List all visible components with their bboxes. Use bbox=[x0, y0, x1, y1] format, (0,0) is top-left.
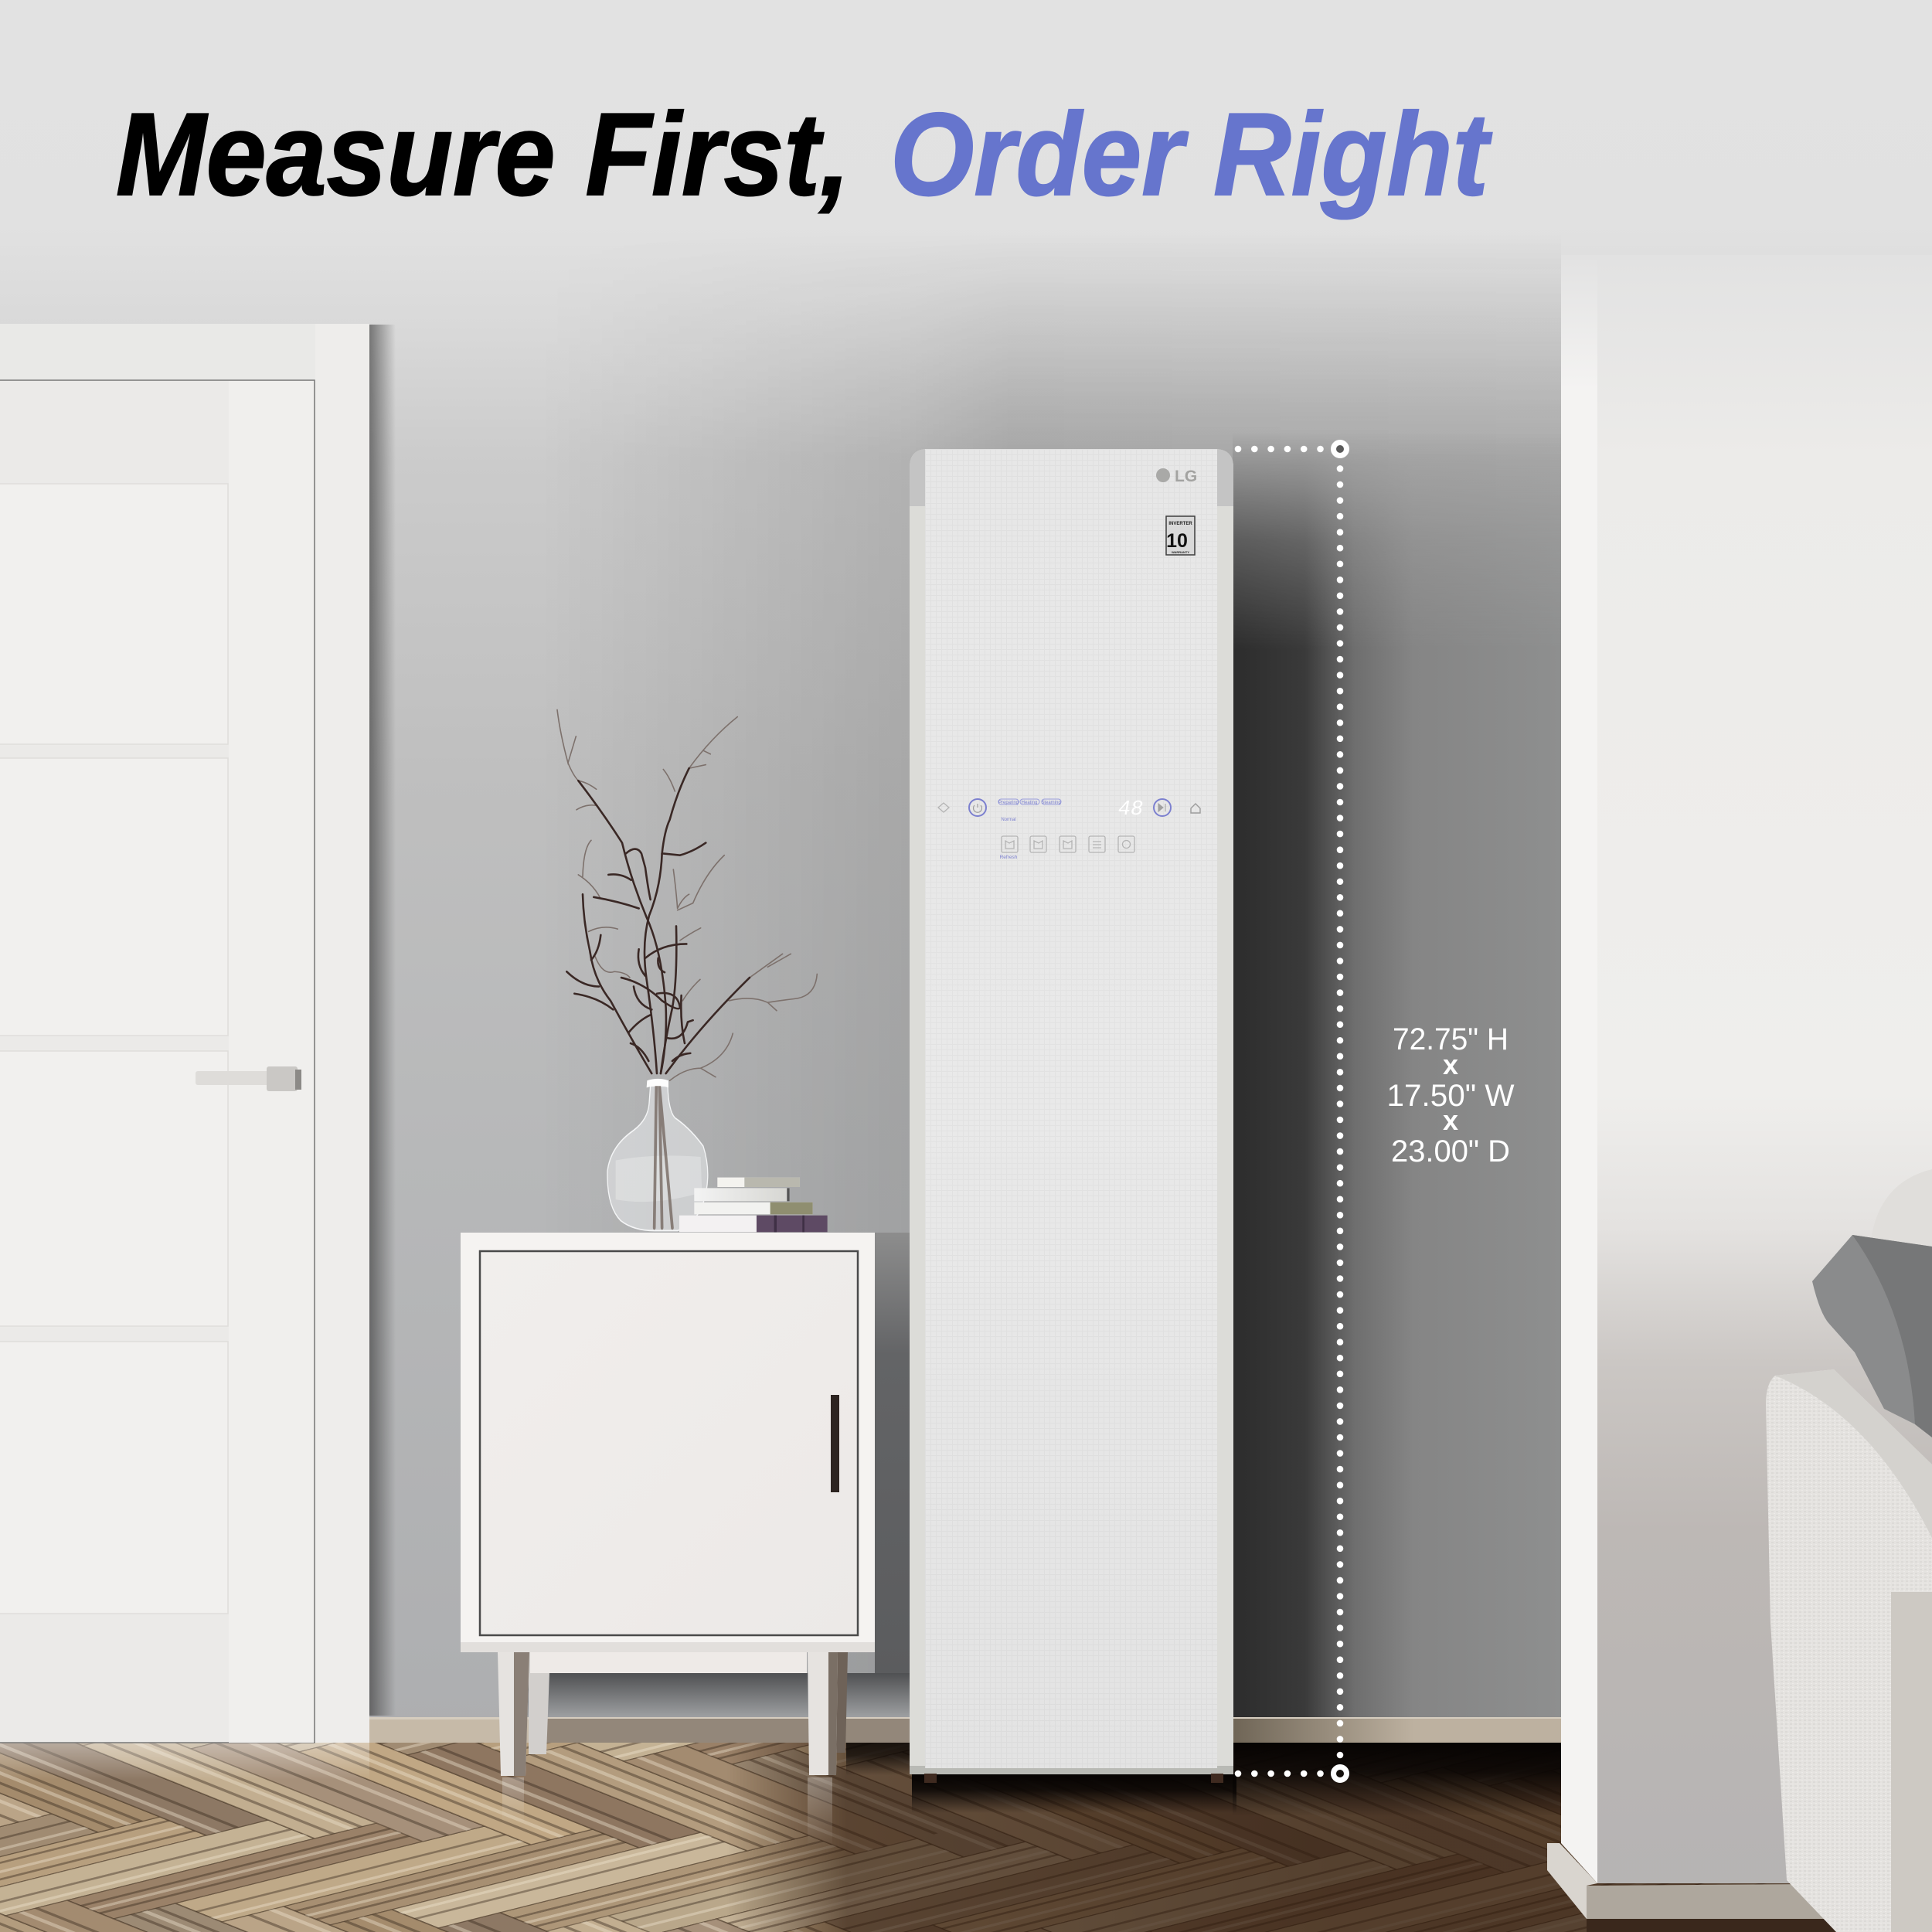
second book bbox=[694, 1188, 790, 1201]
wall corner band bbox=[1561, 255, 1597, 1883]
cycle status chips: Heating bbox=[1022, 801, 1037, 805]
door panels bbox=[0, 484, 228, 1614]
dimensions text: 17.50" W bbox=[1386, 1079, 1515, 1113]
cabinet body bbox=[461, 1233, 875, 1652]
home icon bbox=[1191, 804, 1200, 813]
inverter warranty badge: 10 bbox=[1166, 530, 1188, 552]
control panel bbox=[938, 798, 1200, 860]
height dimension line bbox=[1238, 442, 1346, 1781]
vase rim bbox=[647, 1079, 668, 1087]
grey pillow bbox=[1812, 1235, 1932, 1437]
wall face bbox=[1597, 255, 1932, 1883]
sofa with pillow bbox=[1766, 1169, 1932, 1932]
door handle bbox=[196, 1066, 301, 1091]
baseboard bbox=[369, 1717, 1565, 1743]
top end marker bbox=[1334, 442, 1346, 456]
inverter warranty badge: WARRANTY bbox=[1172, 550, 1189, 554]
styler front panel bbox=[925, 449, 1217, 1768]
start button bbox=[1154, 799, 1171, 816]
sofa arm bbox=[1766, 1369, 1932, 1932]
wheels bbox=[924, 1774, 1223, 1783]
title: Measure First, bbox=[116, 89, 850, 220]
bottom dotted leader bbox=[1238, 1770, 1322, 1777]
wifi icon bbox=[938, 803, 949, 812]
side baseboard bbox=[1587, 1883, 1932, 1919]
title: Order Right bbox=[890, 89, 1492, 220]
dimensions text: x bbox=[1443, 1104, 1458, 1136]
styler body bbox=[910, 449, 1233, 1774]
white cabinet bbox=[461, 1233, 875, 1776]
refresh label: Refresh bbox=[1000, 855, 1018, 860]
cabinet handle bbox=[831, 1395, 839, 1492]
dimensions text: x bbox=[1443, 1049, 1458, 1080]
glass vase bbox=[607, 1079, 708, 1230]
LG logo bbox=[1156, 468, 1197, 485]
sofa back cushion bbox=[1870, 1169, 1932, 1267]
door frame bbox=[0, 324, 369, 1743]
top book bbox=[717, 1178, 800, 1187]
right wall corner bbox=[1547, 255, 1932, 1932]
dimensions text: 72.75" H bbox=[1393, 1022, 1509, 1056]
LG styler appliance bbox=[910, 449, 1233, 1783]
vertical dotted line bbox=[1337, 464, 1343, 1755]
branches bbox=[557, 709, 817, 1080]
dark floor past baseboard bbox=[1587, 1919, 1932, 1932]
bottom purple book bbox=[679, 1216, 828, 1232]
inverter warranty badge: INVERTER bbox=[1168, 522, 1192, 526]
decorative branches in glass vase bbox=[557, 709, 817, 1230]
cycle status chips bbox=[998, 799, 1061, 805]
LG logo: LG bbox=[1175, 468, 1197, 485]
door leaf bbox=[0, 380, 315, 1743]
top dotted leader bbox=[1238, 446, 1322, 452]
cycle label: Normal bbox=[1001, 818, 1016, 822]
wall base corner bbox=[1547, 1843, 1597, 1919]
dimensions text bbox=[1386, 1022, 1515, 1168]
dimensions text: 23.00" D bbox=[1391, 1134, 1510, 1168]
bottom end marker bbox=[1334, 1767, 1346, 1781]
cycle status chips: Preparing bbox=[998, 801, 1019, 805]
stack of books bbox=[679, 1178, 828, 1232]
room background wall bbox=[0, 252, 1561, 1717]
cabinet door bbox=[480, 1251, 858, 1635]
power button bbox=[969, 799, 986, 816]
sofa side panel bbox=[1775, 1369, 1932, 1538]
program icons bbox=[1002, 836, 1134, 852]
herringbone wood floor bbox=[0, 1741, 1932, 1932]
white door with frame bbox=[0, 324, 369, 1743]
third book bbox=[694, 1202, 813, 1214]
timer display: 48 bbox=[1118, 798, 1143, 821]
cycle status chips: Steaming bbox=[1041, 801, 1061, 805]
title bbox=[116, 89, 1492, 220]
cabinet legs bbox=[498, 1652, 848, 1776]
inverter warranty badge bbox=[1166, 516, 1195, 555]
